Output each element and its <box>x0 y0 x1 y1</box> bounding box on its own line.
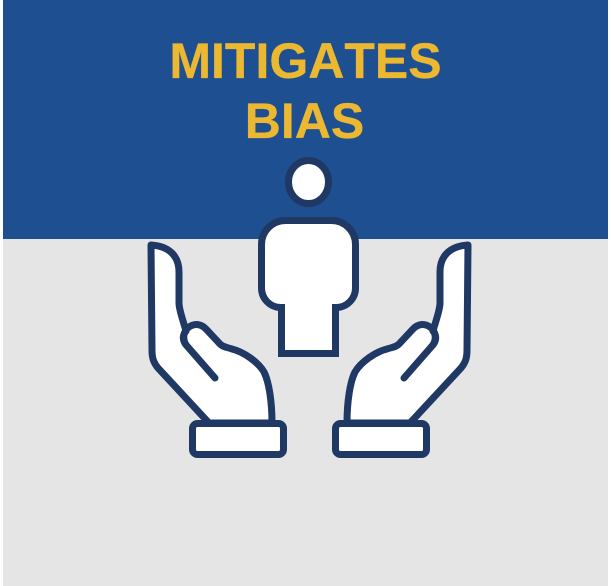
icon: person <box>262 160 356 354</box>
title: MITIGATES <box>169 33 442 89</box>
icon: person between two hands <box>151 160 468 454</box>
grey lower background <box>3 239 608 586</box>
blue header band <box>3 0 608 239</box>
title: BIAS <box>245 93 364 149</box>
icon: left hand <box>151 245 284 454</box>
title <box>169 33 442 149</box>
icon: right hand <box>336 245 468 454</box>
